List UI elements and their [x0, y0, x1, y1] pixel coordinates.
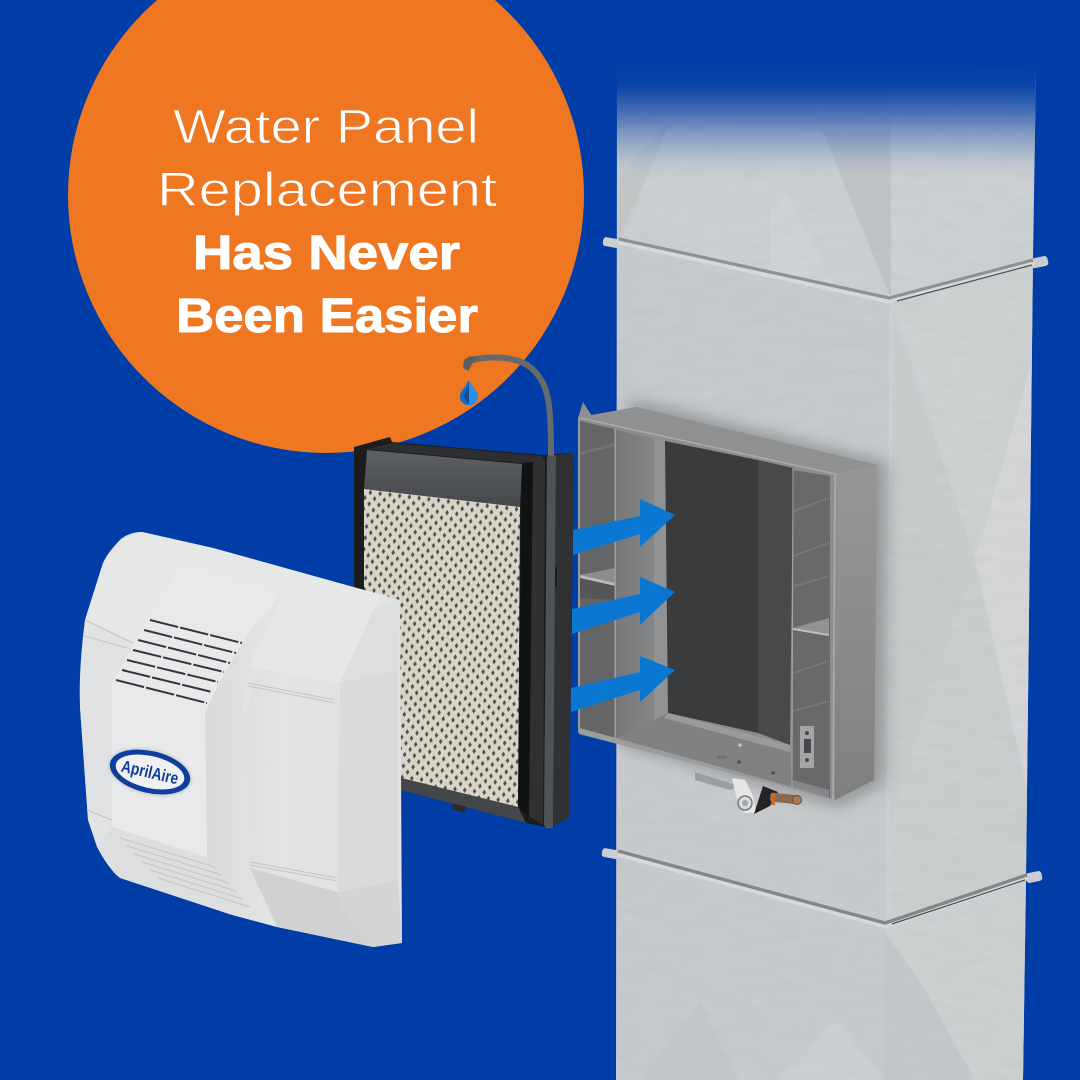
right compartment: [792, 468, 830, 798]
frame lower lip: [401, 778, 526, 823]
water fitting below cabinet: [695, 772, 802, 814]
bottom ridges: [97, 827, 232, 915]
frame header: [364, 450, 522, 507]
top fade into background: [617, 70, 1036, 168]
top rim: [580, 407, 877, 474]
title: Been Easier: [176, 290, 478, 343]
right outer flange: [835, 465, 877, 800]
vent slats: [116, 620, 242, 703]
interior left wall: [616, 430, 654, 738]
cabinet shadow: [620, 398, 888, 808]
humidifier cabinet on duct: [578, 398, 888, 808]
arrow: bottom: [571, 656, 675, 712]
right chamfer: [340, 600, 400, 683]
arrow: top: [573, 499, 675, 555]
vertical side strip: [553, 453, 574, 827]
water panel frame: [354, 437, 574, 828]
orange circle badge: [68, 0, 584, 453]
upper duct flange: [602, 237, 1049, 301]
rear dark panel: [665, 441, 758, 733]
galvanized air duct: [610, 64, 1042, 1080]
panel grooves: [84, 620, 337, 881]
cover outline: [80, 532, 402, 947]
water panel mesh: [364, 489, 520, 807]
cabinet outer shell: [578, 402, 877, 800]
left compartment: [580, 421, 615, 738]
humidifier cover: [80, 532, 402, 947]
title: Replacement: [157, 164, 497, 217]
right main panel: [243, 592, 375, 892]
arrow: middle: [572, 577, 675, 634]
bottom rim: [579, 728, 835, 800]
lower duct flange: [601, 848, 1043, 925]
left side: [80, 620, 133, 827]
water supply tube: [463, 356, 556, 828]
AprilAire logo: [103, 740, 197, 804]
title: [157, 101, 497, 343]
top surface: [85, 532, 382, 643]
lower right base: [250, 868, 373, 947]
interior floor: [616, 713, 792, 787]
AprilAire logo: AprilAire: [119, 757, 180, 788]
title: Has Never: [193, 227, 460, 280]
icon: water drop: [460, 380, 478, 405]
center raised panel: [112, 563, 283, 713]
front rim highlights: [580, 418, 835, 800]
curved sweep: [205, 592, 283, 927]
title: Water Panel: [173, 101, 479, 154]
floor screws: [738, 743, 742, 747]
wiring bracket: [800, 726, 814, 768]
